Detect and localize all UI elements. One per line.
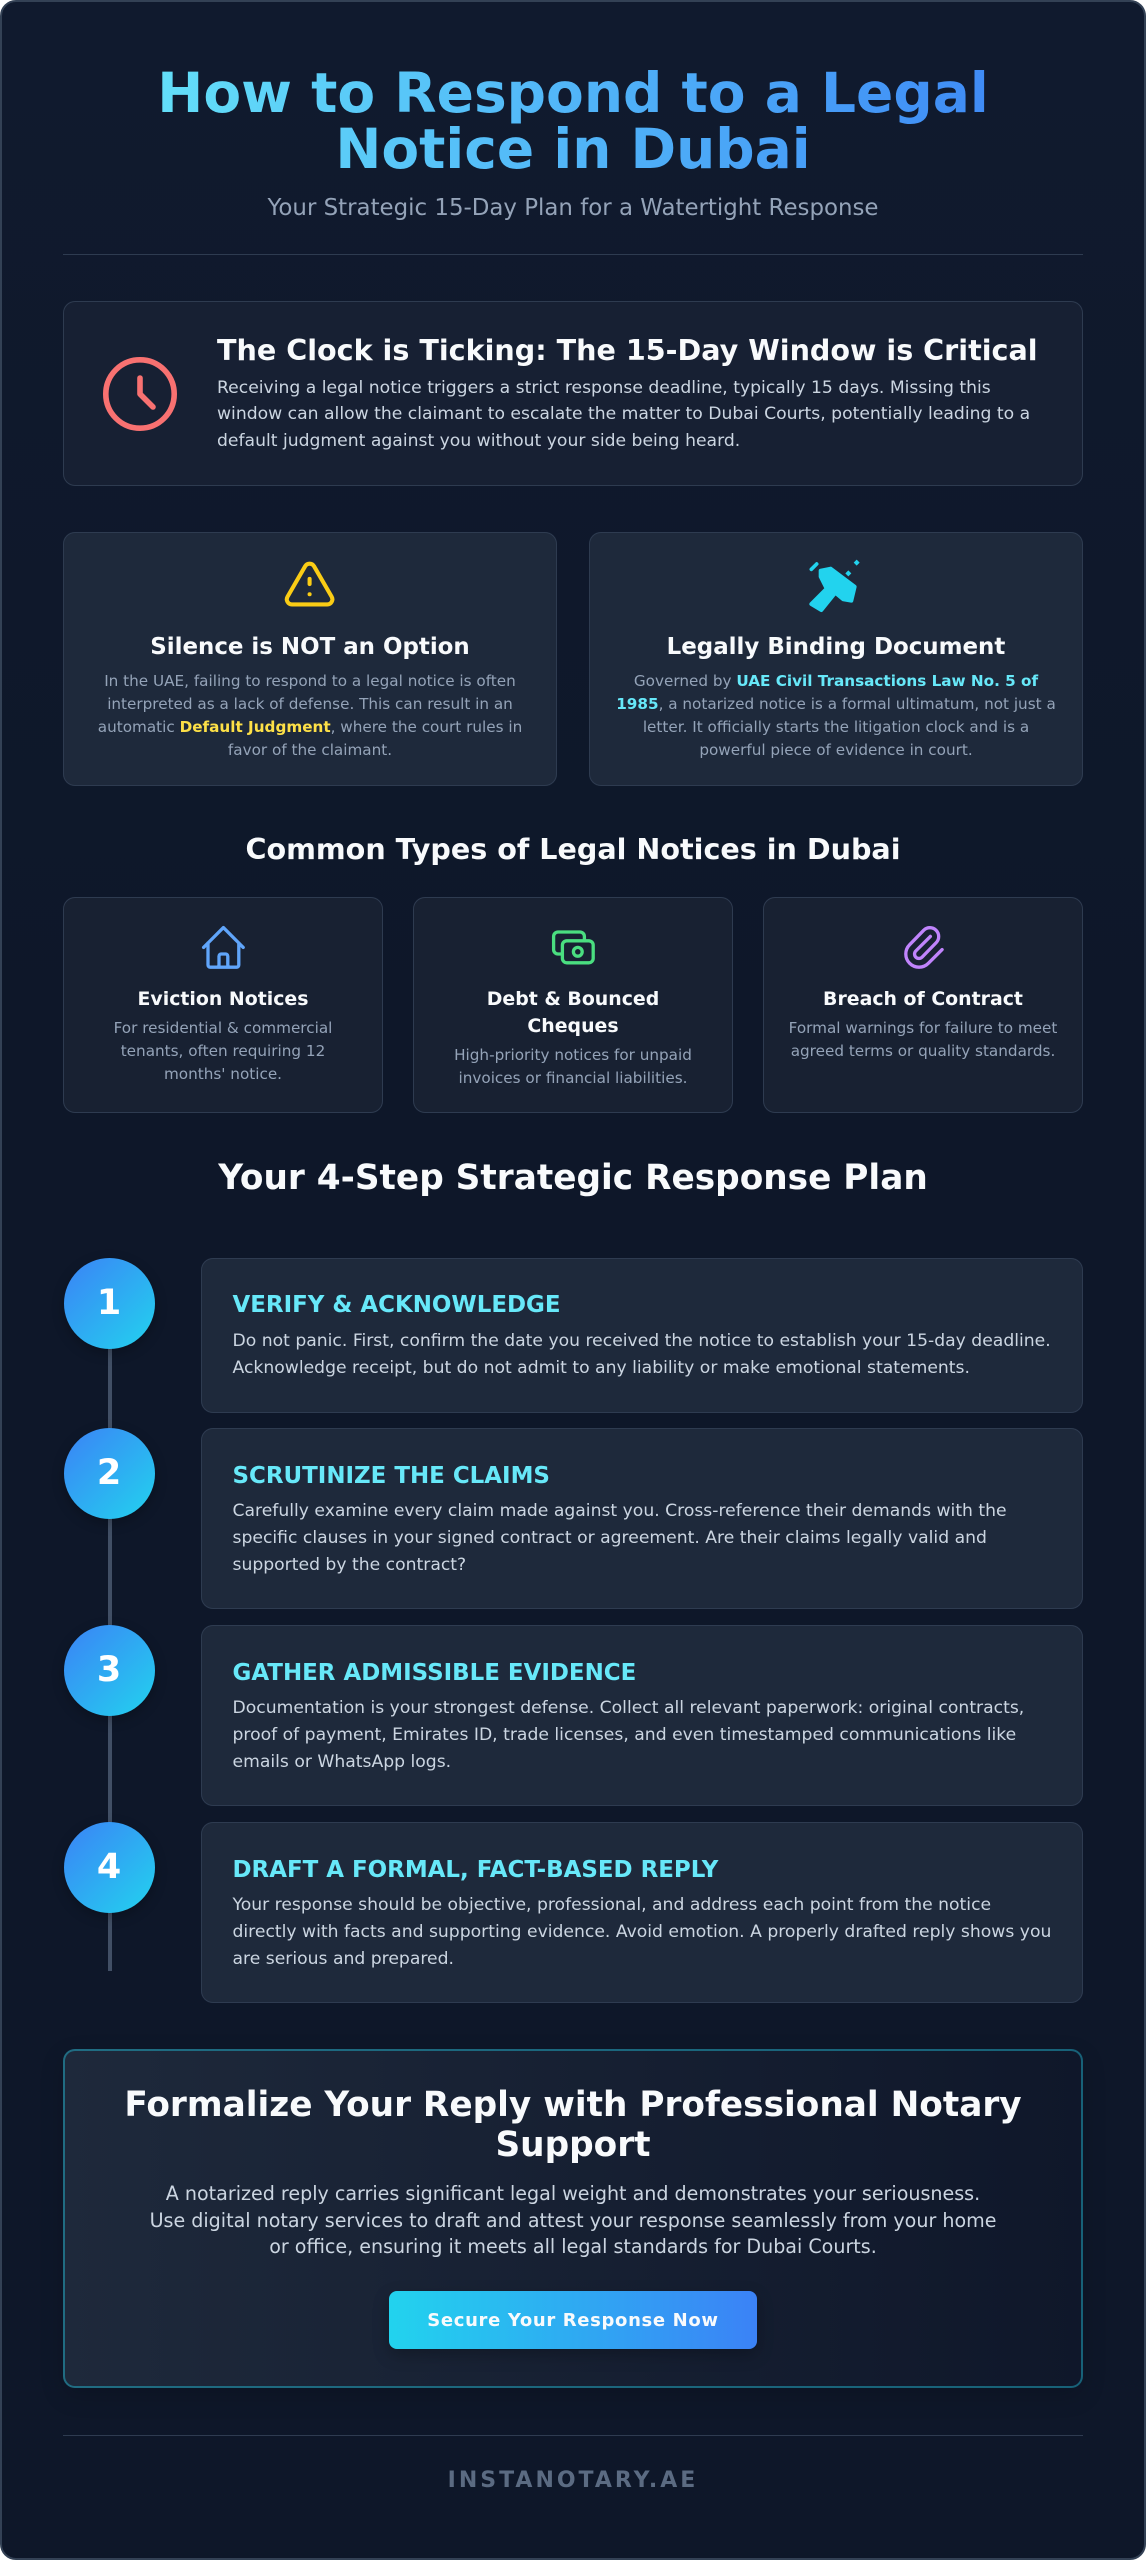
- icon: warning triangle: [284, 562, 334, 606]
- text: step 4: Your response should be objective, professional, and address each point from the notice: [232, 1895, 991, 1915]
- icon: cash: [552, 930, 595, 964]
- panel: step 4: [201, 1822, 1083, 2003]
- panel: call to action: [63, 2049, 1083, 2388]
- heading: call to action: Formalize Your Reply with Professional Notary: [124, 2085, 1022, 2125]
- footer brand: INSTANOTARY.AE: [448, 2468, 698, 2493]
- heading: legally binding: Legally Binding Document: [667, 634, 1005, 660]
- text: call to action: [150, 2182, 996, 2258]
- heading: debt: Cheques: [527, 1015, 619, 1037]
- text: silence: In the UAE, failing to respond to a legal notice is often: [104, 672, 516, 690]
- text: eviction: For residential & commercial: [114, 1019, 332, 1037]
- text: step 1: Acknowledge receipt, but do not admit to any liability or make emotional statements.: [232, 1358, 970, 1378]
- panel: 15-day window: [63, 301, 1083, 486]
- icon: paperclip: [904, 926, 944, 969]
- text: clock body: window can allow the claimant to escalate the matter to Dubai Courts, potentially leading to a: [217, 404, 1030, 424]
- title: [63, 65, 1083, 178]
- button: [389, 2291, 757, 2349]
- text: call to action: or office, ensuring it meets all legal standards for Dubai Courts.: [269, 2235, 877, 2258]
- step number 1: [64, 1258, 154, 1349]
- panel: breach of contract: [763, 897, 1083, 1113]
- text: breach: agreed terms or quality standards.: [791, 1042, 1055, 1060]
- icon: clock: [103, 357, 177, 431]
- icon: gavel: [809, 560, 860, 612]
- step number 3: 3: [97, 1650, 121, 1690]
- text: call to action: A notarized reply carries significant legal weight and demonstrates your seriousness.: [166, 2182, 980, 2205]
- heading: call to action: Support: [495, 2125, 651, 2165]
- step number 1: 1: [97, 1283, 121, 1323]
- panel: eviction notices: [63, 897, 383, 1113]
- text: call to action: Use digital notary services to draft and attest your response seamlessly from your home: [150, 2208, 996, 2232]
- text: debt: High-priority notices for unpaid: [454, 1046, 692, 1064]
- panel: debt and bounced cheques: [413, 897, 733, 1113]
- heading: eviction: Eviction Notices: [138, 988, 308, 1010]
- heading: silence: Silence is NOT an Option: [150, 634, 470, 660]
- heading: breach: Breach of Contract: [823, 988, 1023, 1010]
- heading: step 3: GATHER ADMISSIBLE EVIDENCE: [232, 1660, 636, 1686]
- text: step 4: [232, 1895, 1051, 1969]
- text: silence: favor of the claimant.: [228, 741, 392, 759]
- text: legally binding: 1985, a notarized notice is a formal ultimatum, not just a: [616, 695, 1056, 713]
- panel: step 3: [201, 1625, 1083, 1806]
- text: step 3: emails or WhatsApp logs.: [232, 1752, 451, 1772]
- title: Notice in Dubai: [335, 117, 811, 181]
- text: step 4: are serious and prepared.: [232, 1949, 454, 1969]
- step number 4: [64, 1822, 154, 1913]
- panel: legally binding: [589, 532, 1083, 786]
- text: silence: automatic Default Judgment, where the court rules in: [98, 718, 522, 736]
- subtitle: Your Strategic 15-Day Plan for a Watertight Response: [267, 195, 878, 221]
- heading: clock is ticking: The Clock is Ticking: The 15-Day Window is Critical: [217, 333, 1038, 367]
- heading: 4-step plan: Your 4-Step Strategic Response Plan: [218, 1158, 928, 1198]
- text: breach: [789, 1019, 1057, 1060]
- text: legally binding: Governed by UAE Civil Transactions Law No. 5 of: [634, 672, 1038, 690]
- panel: silence: [63, 532, 557, 786]
- icon: house: [202, 926, 245, 969]
- text: legally binding: letter. It officially starts the litigation clock and is a: [643, 718, 1029, 736]
- text: legally binding: [616, 672, 1056, 759]
- heading: step 1: VERIFY & ACKNOWLEDGE: [232, 1292, 561, 1318]
- text: silence: interpreted as a lack of defense. This can result in an: [107, 695, 513, 713]
- text: clock body: default judgment against you without your side being heard.: [217, 431, 740, 451]
- text: step 3: [232, 1698, 1024, 1772]
- text: eviction: [114, 1019, 332, 1083]
- text: step 2: Carefully examine every claim made against you. Cross-reference their demands with the: [232, 1501, 1007, 1521]
- text: step 1: [232, 1331, 1051, 1378]
- text: step 2: supported by the contract?: [232, 1555, 466, 1575]
- panel: step 1: [201, 1258, 1083, 1413]
- text: debt: invoices or financial liabilities.: [459, 1068, 687, 1086]
- text: legally binding: powerful piece of evidence in court.: [699, 741, 973, 759]
- step number 2: [64, 1428, 154, 1519]
- text: step 3: Documentation is your strongest defense. Collect all relevant paperwork: original contracts,: [232, 1698, 1024, 1718]
- heading: step 2: SCRUTINIZE THE CLAIMS: [232, 1463, 550, 1489]
- panel: step 2: [201, 1428, 1083, 1609]
- text: step 4: directly with facts and supporting evidence. Avoid emotion. A properly drafted reply shows you: [232, 1922, 1051, 1942]
- text: step 2: [232, 1501, 1007, 1575]
- heading: debt: [487, 988, 659, 1037]
- heading: step 4: DRAFT A FORMAL, FACT-BASED REPLY: [232, 1857, 718, 1883]
- text: clock body: [217, 378, 1030, 451]
- text: step 2: specific clauses in your signed contract or agreement. Are their claims legally valid and: [232, 1528, 987, 1548]
- heading: call to action: [124, 2085, 1022, 2165]
- text: step 3: proof of payment, Emirates ID, trade licenses, and even timestamped communications like: [232, 1725, 1016, 1745]
- button: Secure Your Response Now: [427, 2310, 719, 2331]
- text: debt: [454, 1046, 692, 1086]
- text: clock body: Receiving a legal notice triggers a strict response deadline, typically 15 days. Missing this: [217, 378, 991, 398]
- step number 3: [64, 1625, 154, 1716]
- step number 2: 2: [97, 1453, 121, 1493]
- text: breach: Formal warnings for failure to meet: [789, 1019, 1057, 1037]
- heading: common types: Common Types of Legal Notices in Dubai: [245, 832, 901, 866]
- text: eviction: months' notice.: [164, 1065, 282, 1083]
- step number 4: 4: [97, 1847, 121, 1887]
- heading: debt: Debt & Bounced: [487, 988, 659, 1010]
- title: How to Respond to a Legal: [157, 61, 989, 125]
- text: eviction: tenants, often requiring 12: [121, 1042, 325, 1060]
- text: silence: [98, 672, 522, 759]
- text: step 1: Do not panic. First, confirm the date you received the notice to establish your 15-day deadline.: [232, 1331, 1051, 1351]
